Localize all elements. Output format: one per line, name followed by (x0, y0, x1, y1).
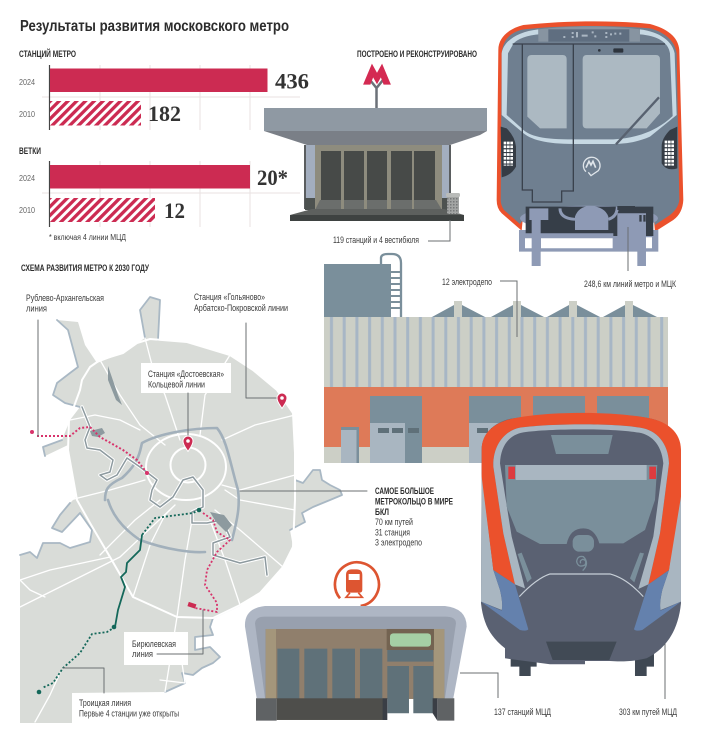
icon: train in circle (335, 562, 379, 606)
bar chart: ветки (19, 146, 300, 227)
title: Результаты развития московского метро (20, 18, 289, 35)
leader: 303 km (664, 640, 666, 699)
MCD train front (481, 413, 681, 676)
headlight left (501, 127, 516, 177)
callout: Dostoevskaya: Кольцевой линии (148, 380, 205, 390)
label: Troitskaya: Первые 4 станции уже открыты (79, 708, 179, 718)
label: 248.6 km: 248,6 км линий метро и МЦК (584, 279, 677, 289)
label: Rublevo: Рублево-Архангельская (26, 293, 104, 303)
destination display (548, 29, 629, 42)
green sign (390, 633, 431, 647)
callout: Dostoevskaya: Станция «Достоевская» (148, 369, 224, 379)
bar 2010: 12 (164, 198, 185, 223)
label: Rublevo: линия (26, 304, 47, 314)
label: 303 km: 303 км путей МЦД (619, 707, 677, 717)
metro logo (583, 157, 600, 176)
leader: Biryulevo (157, 610, 203, 654)
callout: Biryulevo (124, 632, 188, 665)
label: 119 stations: 119 станций и 4 вестибюля (333, 235, 419, 245)
bar 2024: 20* (257, 165, 288, 190)
leader: Troitskaya (63, 668, 104, 693)
callout: Biryulevo: Бирюлевская (132, 639, 176, 649)
icon: metro sign (364, 65, 390, 108)
leader: 137 stations (460, 673, 498, 698)
water tower (324, 254, 401, 317)
heading: ветки: ВЕТКИ (19, 146, 41, 156)
label: 137 stations: 137 станций МЦД (494, 707, 551, 717)
bar 2010: 182 (148, 101, 181, 126)
wiper (616, 97, 659, 144)
wheels and bogies (511, 652, 654, 676)
pin: Golyanovo (277, 393, 287, 408)
footnote: * включая 4 линии МЦД (49, 233, 127, 242)
heading: построено: ПОСТРОЕНО И РЕКОНСТРУИРОВАНО (357, 49, 477, 59)
text block: BKL: 31 станция (375, 528, 410, 538)
leader: Rublevo (37, 320, 39, 436)
text block: BKL: САМОЕ БОЛЬШОЕ (375, 486, 434, 496)
metro train front (497, 21, 683, 266)
map of Moscow (20, 292, 367, 723)
leader: 12 depots (500, 281, 517, 337)
metro station pavilion (264, 65, 487, 221)
headlight right (662, 127, 677, 169)
bar chart: станций метро (19, 48, 309, 130)
Biryulevo line (187, 513, 230, 612)
bar 2024: 2024 (19, 78, 35, 87)
bar 2024: 436 (275, 68, 309, 94)
depot building (324, 254, 668, 463)
leader: Golyanovo (246, 323, 278, 398)
bar 2024: 2024 (19, 174, 35, 183)
icon: bin (446, 193, 460, 214)
heading: схема развития: СХЕМА РАЗВИТИЯ МЕТРО К 2030 ГОДУ (21, 263, 149, 273)
bar 2010: 2010 (19, 206, 35, 215)
leader: BKL (240, 490, 367, 492)
pin: Dostoevskaya (183, 436, 193, 452)
heading: станций метро: СТАНЦИЙ МЕТРО (19, 48, 76, 59)
callout: Biryulevo: линия (132, 649, 153, 659)
text block: BKL: МЕТРОКОЛЬЦО В МИРЕ (375, 496, 453, 506)
label: Troitskaya: Троицкая линия (79, 698, 131, 708)
label: Golyanovo: Арбатско-Покровской линии (194, 303, 288, 313)
bar 2010: 2010 (19, 110, 35, 119)
MCD station (245, 562, 467, 721)
text block: BKL: 70 км путей (375, 517, 413, 527)
bar 2010 (19, 101, 181, 126)
MCD logo (577, 556, 586, 571)
leader: 248.6 km (627, 227, 629, 271)
Rublevo-Arkhangelsk line (30, 427, 149, 475)
callout: Dostoevskaya (141, 363, 231, 393)
label: Golyanovo: Станция «Гольяново» (194, 292, 265, 302)
text block: BKL: 3 электродепо (375, 538, 422, 548)
leader: 119 stations (428, 220, 450, 241)
label: 12 depots: 12 электродепо (442, 277, 492, 287)
bar 2010 (19, 198, 185, 223)
Troitskaya line (37, 508, 201, 694)
undercarriage (519, 206, 658, 266)
leader: Dostoevskaya (187, 393, 189, 437)
text block: BKL: БКЛ (375, 507, 389, 517)
bar 2024 (19, 165, 288, 190)
bar 2024 (19, 68, 309, 94)
